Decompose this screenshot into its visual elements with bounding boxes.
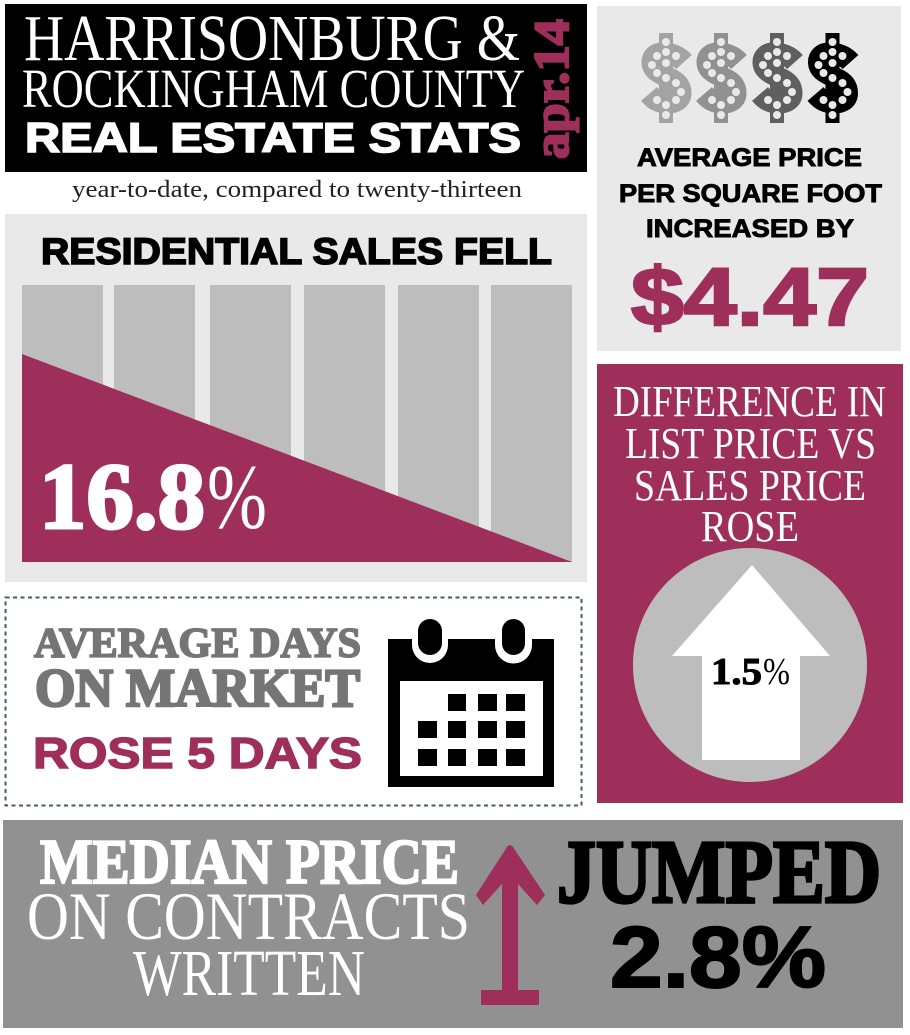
- label line 3: WRITTEN: [133, 937, 365, 1010]
- panel: list vs sales price: [597, 364, 903, 803]
- heading: RESIDENTIAL SALES FELL: [41, 231, 552, 272]
- panel: header: [5, 2, 587, 172]
- text line 4: ROSE: [701, 502, 799, 551]
- icon: dollar sign 2: [703, 33, 740, 123]
- panel: median price: [3, 820, 903, 1028]
- caption line 2: PER SQUARE FOOT: [619, 180, 882, 208]
- circle background: [633, 548, 867, 782]
- icon: dollar sign 3: [759, 33, 796, 123]
- title line 3: REAL ESTATE STATS: [25, 114, 521, 161]
- icon: up arrow: [476, 845, 545, 1005]
- title line 1: HARRISONBURG &: [24, 2, 520, 75]
- panel: price per square foot: [597, 6, 901, 351]
- subtitle: year-to-date, compared to twenty-thirteen: [72, 177, 522, 203]
- percentage value: [711, 651, 790, 693]
- icon: up arrow: [672, 565, 830, 760]
- date label: apr.14: [523, 19, 579, 159]
- title line 2: ROCKINGHAM COUNTY: [22, 58, 525, 119]
- caption line 3: INCREASED BY: [646, 215, 854, 243]
- sales decline value: 16.8: [39, 445, 205, 549]
- panel: days on market: [6, 598, 582, 806]
- text line 3: SALES PRICE: [634, 461, 866, 510]
- price increase value: $4.47: [631, 252, 869, 343]
- label line 2: ON CONTRACTS: [27, 878, 470, 954]
- percentage value: %: [763, 651, 790, 693]
- sales decline value: %: [207, 446, 267, 548]
- icon: dollar sign 4: [814, 33, 852, 123]
- panel: residential sales: [5, 214, 587, 582]
- label line 1: MEDIAN PRICE: [40, 826, 459, 897]
- icon: calendar: [388, 619, 554, 787]
- label line 2: ON MARKET: [35, 658, 360, 718]
- days value: ROSE 5 DAYS: [33, 729, 362, 778]
- median price change: 2.8%: [610, 910, 826, 1006]
- bar chart: [22, 285, 572, 562]
- caption line 1: AVERAGE PRICE: [637, 144, 862, 172]
- percentage value: 1.5: [711, 651, 762, 693]
- icon: dollar sign 1: [648, 33, 685, 123]
- label line 1: AVERAGE DAYS: [34, 621, 361, 667]
